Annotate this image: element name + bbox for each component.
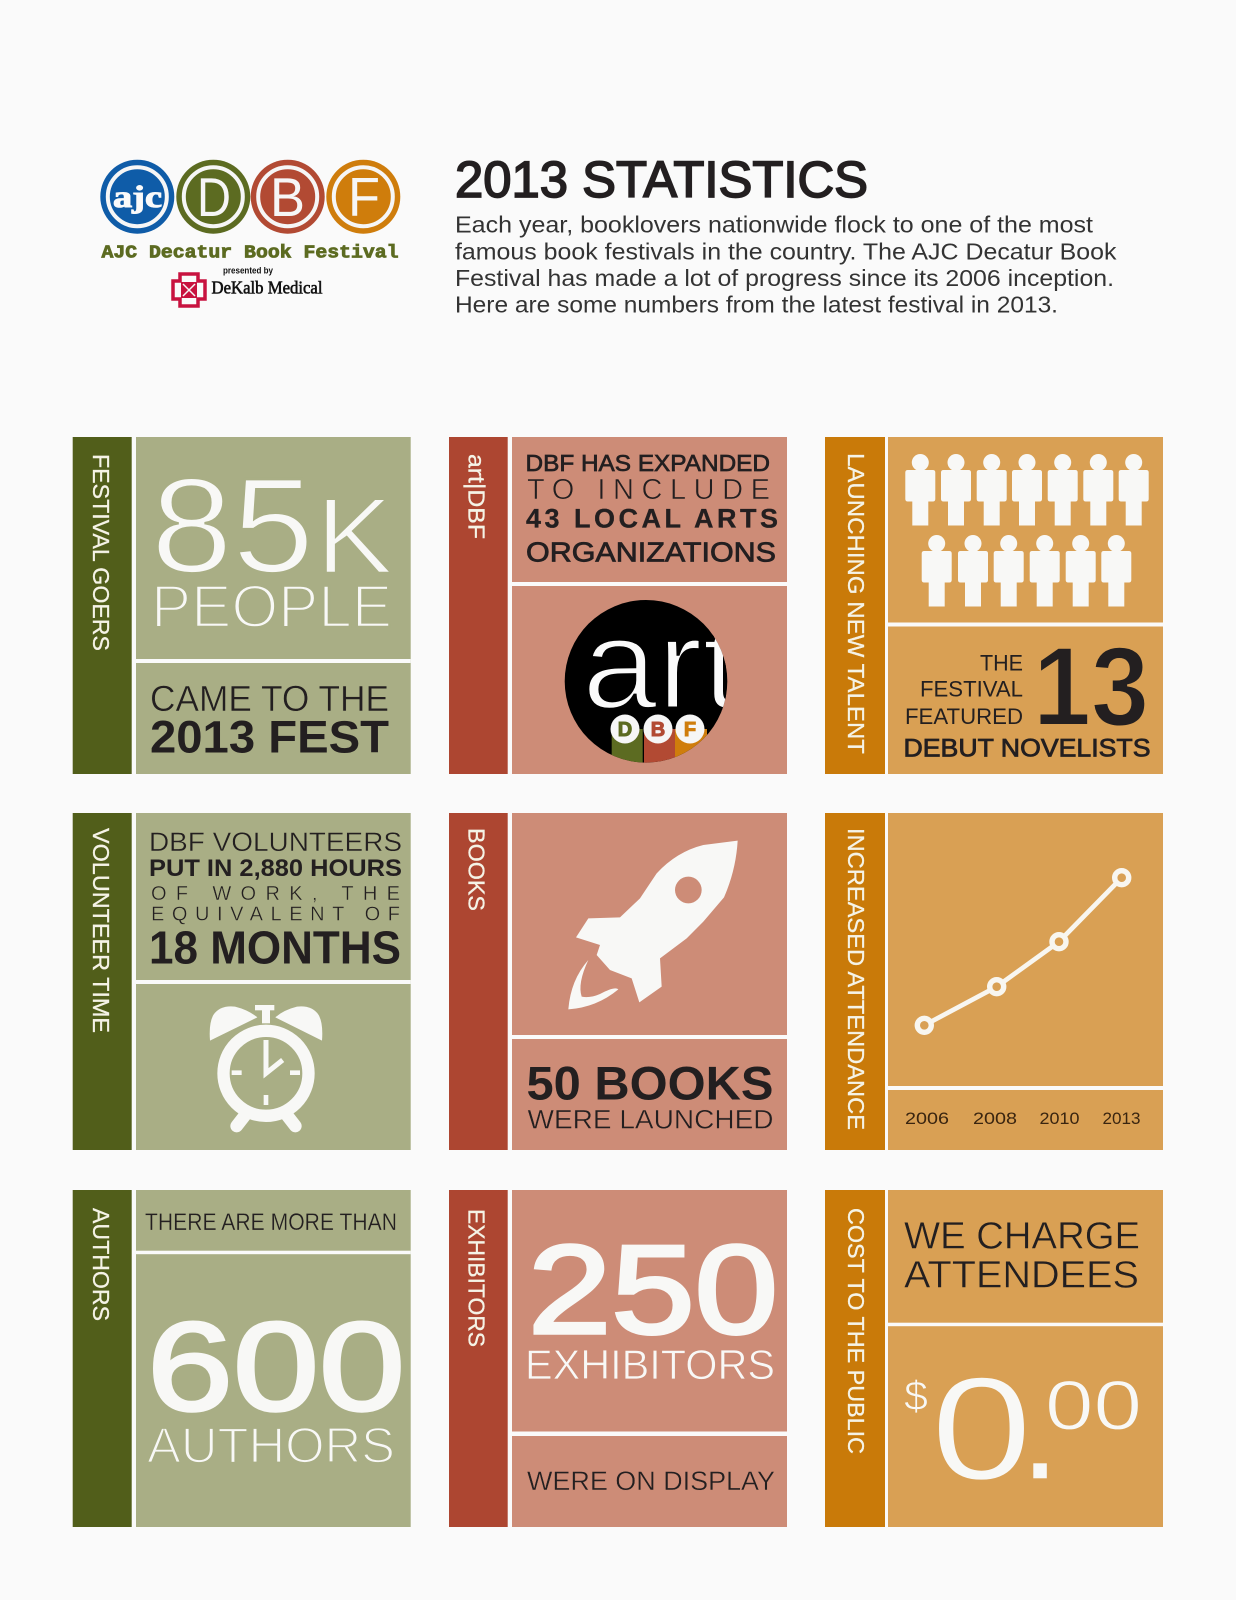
the: THE xyxy=(980,651,1023,676)
icon: rocket xyxy=(568,841,738,1009)
sidebar label: INCREASED ATTENDANCE xyxy=(843,828,869,1130)
panel: exhibitors xyxy=(449,1190,787,1527)
there are more than: THERE ARE MORE THAN xyxy=(145,1209,397,1236)
decimal point xyxy=(1033,1463,1047,1478)
k suffix: K xyxy=(316,475,393,596)
festival: FESTIVAL xyxy=(920,677,1023,702)
number 600: 600 xyxy=(147,1296,405,1437)
were on display: WERE ON DISPLAY xyxy=(527,1466,775,1496)
cents: 00 xyxy=(1045,1366,1142,1444)
axis labels: 2013 xyxy=(1102,1109,1140,1128)
sidebar label: art|DBF xyxy=(464,454,490,539)
we charge: WE CHARGE xyxy=(904,1215,1140,1257)
presented by: presented by xyxy=(223,265,274,276)
put in 2,880 hours: PUT IN 2,880 HOURS xyxy=(149,855,402,882)
panel: cost to the public xyxy=(825,1190,1163,1527)
panel: authors xyxy=(73,1190,411,1527)
logo badge: B: B xyxy=(270,166,305,228)
dbf volunteers: DBF VOLUNTEERS xyxy=(149,827,402,857)
icon: art DBF circle logo: art xyxy=(582,593,740,736)
logo badge: D xyxy=(176,160,250,234)
big number: 85k: 85 xyxy=(151,450,314,601)
icon: alarm clock xyxy=(210,1005,322,1126)
number 250: 250 xyxy=(528,1219,778,1360)
18 months: 18 MONTHS xyxy=(149,921,401,973)
logo badge: ajc: ajc xyxy=(113,179,162,214)
axis labels: 2010 xyxy=(1040,1109,1080,1128)
intro text: Each year, booklovers nationwide flock to one of the most xyxy=(455,212,1093,238)
came to the: CAME TO THE xyxy=(150,678,389,719)
sidebar label: LAUNCHING NEW TALENT xyxy=(843,453,869,754)
panel: volunteer time xyxy=(73,813,411,1150)
logo badge: D: D xyxy=(197,166,231,228)
debut novelists: DEBUT NOVELISTS xyxy=(904,735,1150,763)
dollar sign: $ xyxy=(904,1372,928,1419)
title: 2013 STATISTICS xyxy=(455,151,868,208)
panel: launching new talent xyxy=(825,437,1163,774)
sidebar label: COST TO THE PUBLIC xyxy=(843,1208,869,1454)
sidebar label: AUTHORS xyxy=(88,1208,114,1321)
to include: TO INCLUDE xyxy=(527,474,770,506)
icon: DeKalb Medical cross xyxy=(173,274,205,306)
panel: art DBF xyxy=(449,437,787,774)
were launched: WERE LAUNCHED xyxy=(528,1104,774,1134)
featured: FEATURED xyxy=(905,704,1023,729)
of work, the: OF WORK, THE xyxy=(151,883,400,905)
the equivalent of: EQUIVALENT OF xyxy=(151,904,400,926)
logo badge: F xyxy=(326,160,400,234)
sidebar label: VOLUNTEER TIME xyxy=(88,828,114,1033)
sidebar label: FESTIVAL GOERS xyxy=(88,454,114,651)
icon: art DBF circle logo: F xyxy=(684,719,696,741)
icon: art DBF circle logo: D xyxy=(618,719,632,741)
50 books: 50 BOOKS xyxy=(526,1056,774,1109)
panel: festival goers xyxy=(73,437,411,774)
axis labels: 2008 xyxy=(973,1109,1017,1128)
exhibitors: EXHIBITORS xyxy=(525,1341,775,1388)
icon row: people xyxy=(905,454,1149,606)
sidebar label: EXHIBITORS xyxy=(464,1209,490,1347)
logo badge: B xyxy=(251,160,325,234)
line chart xyxy=(917,871,1129,1032)
panel: books xyxy=(449,813,787,1150)
intro text: Here are some numbers from the latest festival in 2013. xyxy=(455,292,1058,318)
logo: AJC Decatur Book Festival xyxy=(100,160,400,306)
dbf has expanded: DBF HAS EXPANDED xyxy=(526,450,770,476)
logo wordmark: AJC Decatur Book Festival xyxy=(102,243,399,263)
logo badge: ajc xyxy=(100,160,174,234)
price zero: 0 xyxy=(931,1347,1032,1510)
43 local arts: 43 LOCAL ARTS xyxy=(526,503,778,533)
intro text xyxy=(455,212,1117,318)
attendees: ATTENDEES xyxy=(904,1254,1139,1296)
intro text: Festival has made a lot of progress since its 2006 inception. xyxy=(455,265,1114,291)
axis labels: 2006 xyxy=(905,1109,949,1128)
2013 fest: 2013 FEST xyxy=(150,712,389,763)
sidebar label: BOOKS xyxy=(464,828,490,911)
axis labels xyxy=(905,1109,1140,1128)
number 13: 13 xyxy=(1033,624,1149,749)
people: PEOPLE xyxy=(151,573,392,640)
panel: increased attendance xyxy=(825,813,1163,1150)
organizations: ORGANIZATIONS xyxy=(526,537,776,568)
DeKalb Medical: DeKalb Medical xyxy=(212,277,322,297)
intro text: famous book festivals in the country. The AJC Decatur Book xyxy=(455,238,1117,264)
logo badge: F: F xyxy=(348,166,380,228)
authors: AUTHORS xyxy=(147,1417,395,1473)
icon: art DBF circle logo: B xyxy=(651,719,665,741)
